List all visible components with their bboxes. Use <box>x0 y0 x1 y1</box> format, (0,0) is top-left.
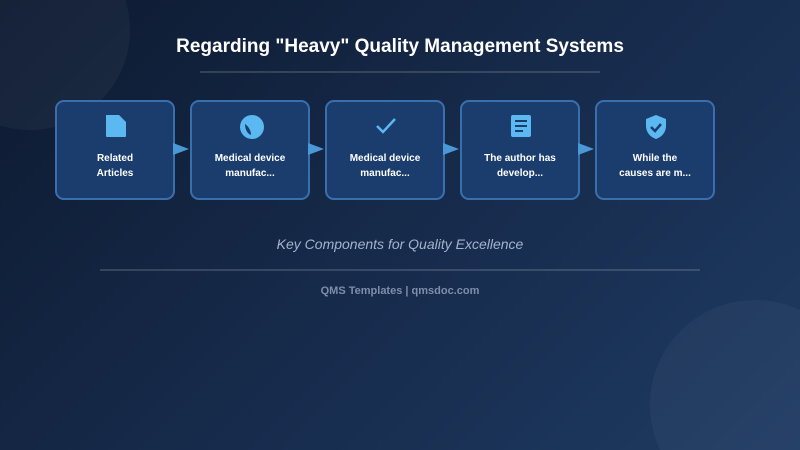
panel: step 1: Articles <box>97 168 133 179</box>
subtitle: Key Components for Quality Excellence <box>277 236 523 252</box>
arrow 2 <box>308 143 324 155</box>
panel: step 5 <box>595 100 715 200</box>
panel: step 4 <box>460 100 580 200</box>
arrow 3 <box>443 143 459 155</box>
panel: step 3: Medical device <box>350 153 420 164</box>
panel: step 4: The author has <box>484 153 556 164</box>
panel: step 1: Related <box>97 153 133 164</box>
icon: document <box>106 115 126 137</box>
panel: step 5: While the <box>633 153 677 164</box>
arrow 1 <box>173 143 189 155</box>
title: Regarding "Heavy" Quality Management Systems <box>176 36 624 57</box>
panel: step 1 <box>55 100 175 200</box>
footer: QMS Templates | qmsdoc.com <box>321 285 479 297</box>
panel: step 2: manufac... <box>225 168 275 179</box>
panel: step 5: causes are m... <box>619 168 691 179</box>
icon: shield <box>646 115 666 139</box>
icon: text doc <box>511 115 531 137</box>
panel: step 2: Medical device <box>215 153 285 164</box>
arrow 4 <box>578 143 594 155</box>
panel: step 3: manufac... <box>360 168 410 179</box>
icon: check <box>376 118 396 134</box>
panel: step 2 <box>190 100 310 200</box>
panel: step 3 <box>325 100 445 200</box>
icon: globe <box>240 115 264 139</box>
panel: step 4: develop... <box>497 168 543 179</box>
